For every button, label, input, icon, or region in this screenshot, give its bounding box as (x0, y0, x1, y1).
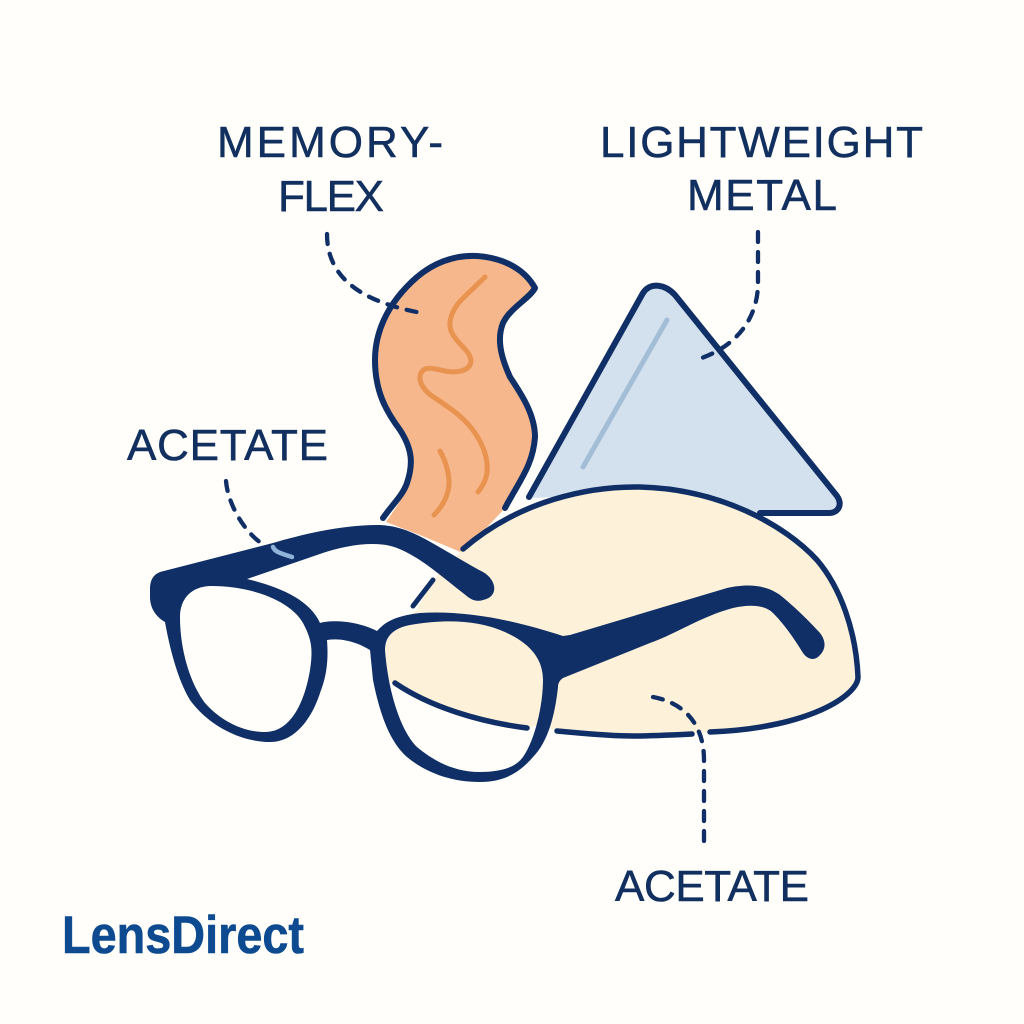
shape: acetate dome (383, 487, 858, 736)
label: acetate base: ACETATE (615, 862, 809, 911)
glasses frame and temples (150, 525, 825, 782)
label: memory-flex: FLEX (278, 172, 384, 221)
label: lightweight metal: LIGHTWEIGHT (600, 118, 923, 167)
shape: lightweight metal triangle (529, 286, 840, 513)
label: lightweight metal: METAL (687, 171, 837, 220)
label: lightweight metal (600, 118, 923, 220)
logo: LensDirect: LensDirect (62, 906, 304, 965)
leader lines (226, 232, 758, 843)
label: memory-flex: MEMORY- (217, 118, 443, 167)
label: memory-flex (217, 118, 443, 221)
highlight on temple (273, 547, 292, 557)
label: acetate temple: ACETATE (127, 421, 328, 470)
shape: memory-flex orange blob (375, 256, 535, 553)
